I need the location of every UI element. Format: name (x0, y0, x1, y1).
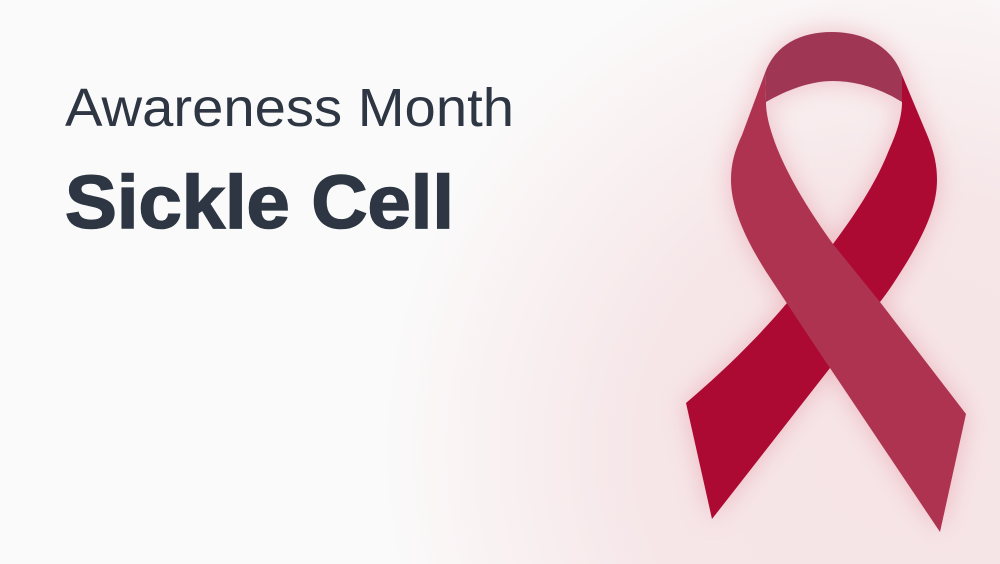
icon: awareness ribbon (686, 32, 966, 532)
heading: Awareness Month: Awareness Month (65, 78, 514, 138)
ribbon right strand, crossing to lower left (686, 75, 937, 519)
heading: Sickle Cell: Sickle Cell (65, 160, 454, 244)
ribbon top loop band (765, 32, 902, 102)
ribbon left strand, crossing to lower right (731, 73, 966, 532)
ribbon glow (686, 32, 966, 532)
